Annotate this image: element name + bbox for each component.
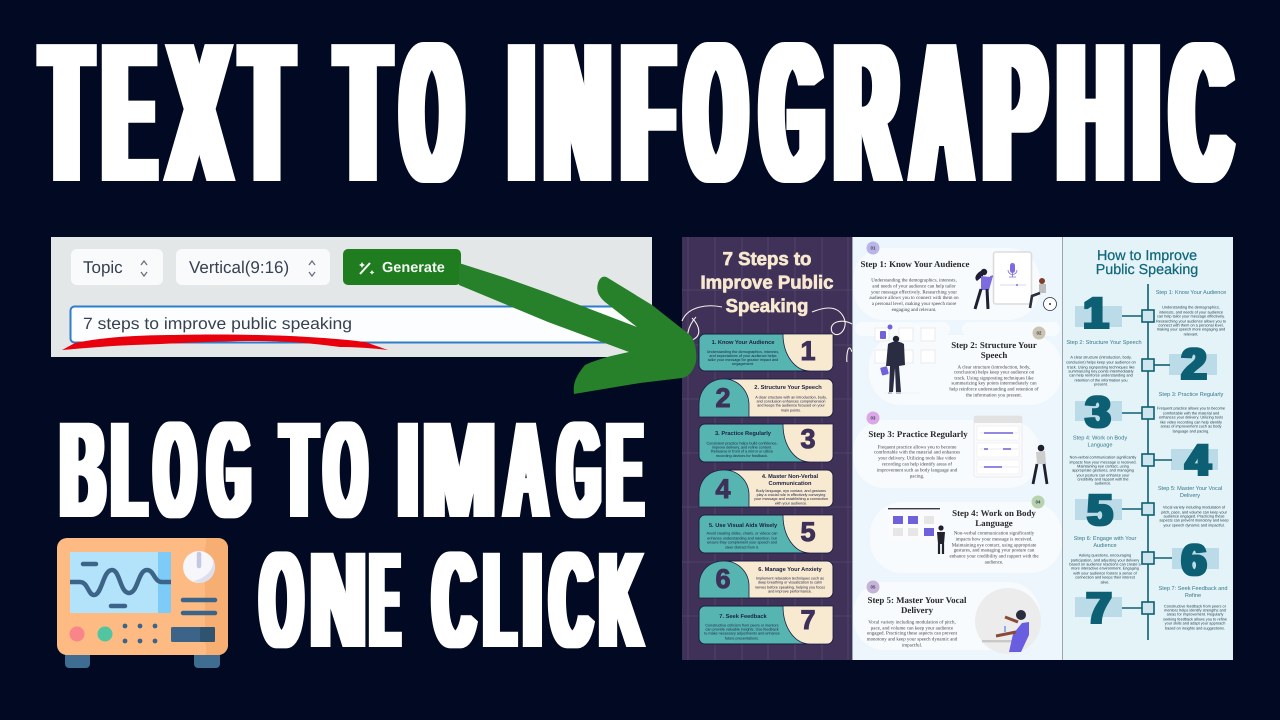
timeline step 7: 7: [1087, 584, 1111, 633]
step 5 block: pace, and volume can keep your audience: [871, 626, 954, 632]
heading: how to improve: Public Speaking: [1096, 262, 1198, 278]
timeline step 5: Vocal variety including modulation of: [1163, 506, 1226, 510]
step 2 block: 02: [1037, 330, 1042, 336]
input: prompt text: 7 steps to improve public speaking: [83, 315, 352, 333]
card: step 5: Avoid creating slides, charts, or videos can: [706, 532, 778, 536]
card: step 3: Consistent practice helps build confidence,: [706, 442, 778, 446]
card: step 2: [699, 379, 833, 417]
step 1 block: Understanding the demographics, interests,: [871, 278, 957, 284]
panel: teal timeline infographic: [1063, 237, 1233, 660]
timeline step 4: 4: [1186, 436, 1211, 485]
dropdown: topic: Topic: [83, 258, 123, 277]
step 4 block: enhance your credibility and rapport with the: [949, 554, 1039, 560]
step 5 block: [866, 580, 967, 648]
step 3 block: 03: [871, 416, 876, 420]
card: step 6: nerves before speaking, helping you focus: [755, 586, 825, 590]
card: step 3: Rehearse in front of a mirror or utilize: [711, 450, 773, 454]
headline: one click: [261, 524, 642, 677]
timeline step 4: audience.: [1095, 482, 1111, 486]
heading: 7 steps: Improve Public: [700, 272, 834, 292]
timeline step 5: pitch, pace, and volume can keep your: [1161, 510, 1228, 514]
card: step 4: Communication: [769, 480, 812, 487]
timeline step 6: alive.: [1101, 580, 1109, 584]
timeline step 4: Language: [1088, 442, 1112, 448]
card: step 1: [699, 334, 833, 371]
timeline step 1: Researching your audience allows you to: [1156, 320, 1226, 324]
timeline step 2: Step 2: Structure Your Speech: [1066, 339, 1142, 346]
illustration: dashboard and walking woman: [974, 416, 1047, 484]
card: step 5: 5: [800, 517, 816, 547]
timeline step 1: Understanding the demographics,: [1162, 306, 1220, 310]
step 5 block: Vocal variety including modulation of pitch,: [868, 620, 956, 626]
step 5 block: 05: [871, 584, 876, 590]
title: text to infographic: I: [510, 2, 532, 224]
step 1 block: engaging and relevant.: [892, 307, 936, 313]
decoration: white swirls: [682, 306, 852, 362]
title: text to infographic: I: [1136, 2, 1157, 224]
step 2 block: A clear structure (introduction, body,: [958, 364, 1030, 370]
illustration: profile board and presenter: [888, 508, 945, 554]
step 2 block: Speech: [981, 350, 1007, 360]
step 4 block: impacts how your message is received.: [955, 536, 1033, 542]
timeline step 6: 6: [1182, 536, 1206, 585]
headline: blog to image: M: [423, 394, 495, 547]
title: text to infographic: O: [687, 2, 745, 224]
icon: oscilloscope device: [57, 538, 228, 668]
card: step 4: with your audience.: [775, 502, 807, 506]
step 5 block: engaged. Practicing these aspects can prevent: [867, 630, 958, 636]
step 3 block: pacing.: [910, 474, 924, 480]
card: step 3: [699, 424, 833, 462]
headline: one click: O: [261, 524, 302, 677]
card: step 7: Constructive criticism from peers or mentors: [705, 624, 779, 628]
step 2 block: track. Using signposting techniques like: [954, 376, 1034, 382]
timeline step 7: areas for improvement. Regularly: [1167, 612, 1223, 616]
card: step 1: 1: [800, 336, 816, 366]
timeline step 4: appropriate gestures, and managing: [1072, 468, 1134, 472]
step 4 block: audience.: [985, 560, 1003, 566]
timeline step 5: Step 5: Master Your Vocal: [1158, 485, 1222, 492]
step 5 block: Step 5: Master Your Vocal: [868, 595, 967, 605]
title: text to infographic: N: [546, 2, 609, 224]
headline: blog to image: B: [61, 394, 105, 547]
step 1 block: a personal level, making your speech more: [872, 301, 957, 307]
timeline step 3: 3: [1086, 388, 1110, 437]
step 2 block: the information you present.: [966, 392, 1022, 398]
headline: blog to image: L: [112, 394, 146, 547]
timeline step 2: A clear structure (introduction, body,: [1070, 356, 1132, 360]
card: step 6: deep breathing or visualization to calm: [758, 580, 822, 584]
card: step 1: engagement.: [732, 362, 754, 366]
timeline step 4: Step 4: Work on Body: [1073, 434, 1127, 442]
title: text to infographic: T: [44, 2, 90, 224]
headline: blog to image: G: [209, 394, 250, 547]
card: step 4: [699, 470, 833, 507]
card: step 5: [699, 515, 833, 553]
timeline step 7: based on insights and suggestions.: [1165, 626, 1225, 630]
timeline step 4: Maintaining eye contact, using: [1077, 464, 1129, 468]
timeline step 3: enhances your delivery. Utilizing tools: [1159, 416, 1223, 420]
card: step 2: A clear structure with an introduction, body,: [755, 396, 827, 400]
headline: blog to image: I: [398, 394, 418, 547]
card: step 1: and expectations of your audience helps: [709, 354, 777, 358]
heading: 7 steps: 7 Steps to: [723, 248, 811, 269]
timeline step 5: [1075, 485, 1229, 535]
card: step 3: 3: [800, 424, 816, 454]
card: step 7: [699, 605, 833, 644]
card: step 1: Understanding the demographics, interests,: [707, 350, 779, 354]
underline: red brush stroke: [62, 335, 388, 350]
timeline step 6: more interactive environment. Engaging: [1071, 566, 1139, 570]
card: step 6: Implement relaxation techniques such as: [756, 576, 824, 580]
step 2 block: Step 2: Structure Your: [951, 340, 1037, 350]
headline: one click: C: [550, 524, 592, 677]
timeline step 3: areas of improvement such as body: [1161, 424, 1222, 428]
card: step 5: steer distract from it.: [725, 546, 759, 550]
timeline step 2: [1066, 339, 1217, 389]
timeline step 3: Step 3: Practice Regularly: [1159, 391, 1224, 398]
step 4 block: Language: [975, 518, 1013, 528]
title: text to infographic: R: [836, 2, 897, 224]
timeline step 6: Step 6: Engage with Your: [1074, 535, 1137, 542]
timeline step 4: impacts how your message is received.: [1069, 460, 1137, 464]
card: step 2: and keeps the audience focused on your: [757, 404, 826, 408]
step 1 block: Step 1: Know Your Audience: [861, 259, 970, 269]
card: step 4: your message and establishing a connection: [754, 497, 828, 501]
card: step 3: improve delivery, and refine content.: [712, 446, 772, 450]
timeline step 4: credibility and rapport with the: [1077, 478, 1129, 482]
card: step 6: and improve performance.: [768, 590, 812, 594]
title: text to infographic: [44, 2, 1230, 224]
button: generate: [343, 249, 461, 285]
timeline step 1: 1: [1084, 289, 1108, 338]
step 1 block: your message effectively. Researching your: [871, 290, 957, 296]
step 3 block: recording can help identify areas of: [882, 462, 952, 468]
timeline step 4: Non-verbal communication significantly: [1070, 456, 1136, 460]
timeline step 1: relevant.: [1184, 332, 1198, 336]
title: text to infographic: E: [105, 2, 154, 224]
card: step 6: 6. Manage Your Anxiety: [758, 566, 823, 573]
card: step 2: 2: [715, 383, 731, 413]
timeline step 5: 5: [1088, 486, 1112, 535]
card: step 4: play a crucial role in effectively conveying: [757, 493, 825, 497]
timeline step 1: Step 1: Know Your Audience: [1156, 289, 1226, 296]
timeline step 1: [1075, 289, 1226, 338]
timeline step 7: Step 7: Seek Feedback and: [1158, 585, 1228, 592]
step 1 block: audience allows you to connect with them on: [869, 295, 959, 301]
timeline step 6: Asking questions, encouraging: [1079, 554, 1131, 558]
step 4 block: Step 4: Work on Body: [952, 508, 1036, 518]
card: step 4: Body language, eye contact, and gestures: [756, 489, 826, 493]
card: step 7: 7. Seek Feedback: [719, 613, 768, 620]
card: step 1: 1. Know Your Audience: [712, 339, 774, 346]
title: text to infographic: T: [244, 2, 290, 224]
timeline step 7: your skills and adapt your approach: [1165, 622, 1225, 626]
headline: blog to image: O: [155, 394, 195, 547]
illustration: speaker at microphone: [975, 588, 1041, 654]
headline: blog to image: G: [559, 394, 600, 547]
headline: one click: L: [485, 524, 515, 677]
step 1 block: 01: [871, 246, 876, 250]
title: text to infographic: G: [763, 2, 822, 224]
timeline step 6: connection and keeps their interest: [1075, 576, 1136, 580]
timeline step 5: Delivery: [1180, 492, 1200, 499]
step 3 block: your delivery. Utilizing tools like video: [878, 456, 956, 462]
step 3 block: Frequent practice allows you to become: [878, 444, 957, 450]
dropdown: topic: [71, 249, 163, 285]
title: text to infographic: O: [403, 2, 461, 224]
title: text to infographic: H: [1059, 2, 1122, 224]
card: step 6: 6: [715, 564, 731, 594]
timeline step 3: like video recording can help identify: [1160, 420, 1222, 424]
timeline step 2: retention of the information you: [1074, 378, 1128, 382]
card: step 3: recording devices for feedback.: [716, 454, 768, 458]
timeline step 3: Frequent practice allows you to become: [1157, 406, 1225, 410]
timeline step 7: Refine: [1185, 592, 1201, 599]
step 1 block: and needs of your audience can help tailor: [872, 284, 956, 290]
card: step 7: can provide valuable insights. Use feedback: [705, 628, 779, 632]
step 2 block: [949, 326, 1046, 398]
headline: blog to image: A: [505, 394, 547, 547]
card: step 2: 2. Structure Your Speech: [754, 384, 822, 391]
step 3 block: improvement such as body language and: [877, 468, 958, 474]
step 4 block: Maintaining eye contact, using appropriate: [952, 542, 1037, 548]
timeline step 2: present.: [1094, 382, 1108, 386]
step 4 block: Non-verbal communication significantly: [954, 530, 1035, 536]
title: text to infographic: F: [623, 2, 672, 224]
timeline step 1: can help tailor your message effectively.: [1157, 314, 1225, 318]
step 4 block: [949, 496, 1044, 566]
headline: blog to image: [61, 394, 642, 547]
step 2 block: summarizing key points intermediately can: [951, 380, 1037, 386]
timeline step 6: based on audience reactions can create a: [1069, 562, 1142, 566]
headline: one click: C: [433, 524, 475, 677]
timeline step 1: connect with them on a personal level,: [1158, 324, 1224, 328]
text: K: [600, 524, 642, 677]
timeline step 5: aspects can prevent monotony and keep: [1159, 518, 1229, 522]
step 3 block: comfortable with the material and enhances: [874, 450, 960, 456]
title: text to infographic: T: [338, 2, 388, 224]
card: step 2: main points.: [781, 408, 801, 412]
step 3 block: [866, 412, 968, 480]
panel: purple infographic: [682, 237, 852, 660]
timeline step 6: participation, and adjusting your delivery: [1071, 558, 1139, 562]
illustration: tablet with mic and people: [975, 252, 1056, 310]
timeline step 6: Audience: [1093, 542, 1117, 549]
card: step 4: 4. Master Non-Verbal: [762, 473, 819, 480]
timeline step 5: your speech dynamic and impactful.: [1163, 524, 1225, 528]
headline: one click: E: [371, 524, 398, 677]
timeline step 6: with your audience fosters a sense of: [1073, 572, 1138, 576]
timeline step 7: [1075, 584, 1228, 633]
card: step 2: and conclusion enhances comprehension: [756, 400, 826, 404]
step 5 block: impactful.: [902, 642, 922, 648]
heading: 7 steps: Speaking: [726, 295, 808, 316]
panel: generator UI screenshot: [51, 237, 652, 357]
title: text to infographic: X: [170, 2, 228, 224]
step 3 block: Step 3: Practice Regularly: [868, 429, 968, 439]
timeline step 1: making your speech more engaging and: [1157, 328, 1225, 332]
step 1 block: [861, 242, 970, 313]
headline: blog to image: O: [325, 394, 366, 547]
button: generate: Generate: [382, 260, 445, 276]
timeline step 3: [1075, 388, 1225, 437]
timeline step 7: mentors helps identify strengths and: [1164, 608, 1226, 612]
arrow: green brush arrow: [459, 263, 696, 394]
step 4 block: 04: [1036, 500, 1041, 504]
illustration: man with squares: [875, 324, 935, 393]
timeline step 1: interests, and needs of your audience: [1159, 310, 1223, 314]
heading: 7 steps: [700, 248, 834, 316]
timeline step 4: [1069, 434, 1218, 486]
step 5 block: monotony and keep your speech dynamic and: [867, 636, 958, 642]
card: step 5: 5. Use Visual Aids Wisely: [709, 522, 778, 529]
timeline step 3: language and pacing.: [1173, 430, 1209, 434]
timeline step 2: can help reinforce understanding and: [1069, 374, 1133, 378]
panel: light serif infographic: [852, 237, 1063, 660]
headline: blog to image: T: [282, 394, 316, 547]
card: step 7: to make necessary adjustments and enhance: [704, 632, 780, 636]
headline: one click: I: [524, 524, 541, 677]
dropdown: vertical format: [176, 249, 330, 285]
timeline step 6: [1069, 535, 1219, 585]
card: step 7: 7: [800, 605, 816, 635]
timeline step 2: track. Using signposting techniques like: [1067, 366, 1135, 370]
step 2 block: conclusion) helps keep your audience on: [954, 370, 1035, 376]
card: step 6: [699, 561, 833, 598]
dropdown: vertical format: Vertical(9:16): [189, 258, 289, 277]
timeline step 2: 2: [1182, 340, 1206, 389]
step 4 block: gestures, and managing your posture can: [954, 548, 1035, 554]
title: text to infographic: A: [913, 2, 970, 224]
timeline step 5: audience engaged. Practicing these: [1163, 514, 1225, 518]
card: step 7: future presentations.: [725, 636, 759, 640]
step 5 block: Delivery: [901, 605, 934, 615]
title: text to infographic: P: [985, 2, 1044, 224]
card: step 1: tailor your message for greater impact and: [708, 358, 778, 362]
card: step 5: ensure they complement your speech and: [707, 540, 777, 544]
timeline step 4: your posture can enhance your: [1076, 474, 1130, 478]
input: prompt text: [70, 306, 646, 342]
timeline spine: [1147, 284, 1149, 640]
card: step 5: enhance understanding and retention, but: [707, 536, 778, 540]
card: step 4: 4: [715, 474, 731, 504]
text: E: [607, 394, 642, 547]
timeline step 7: seeking feedback allows you to refine: [1163, 618, 1227, 622]
headline: one click: N: [311, 524, 366, 677]
step 2 block: help reinforce understanding and retention of: [949, 386, 1039, 392]
heading: how to improve: How to Improve: [1097, 248, 1197, 264]
timeline step 7: Constructive feedback from peers or: [1164, 604, 1227, 608]
card: step 3: 3. Practice Regularly: [715, 430, 772, 437]
timeline step 2: summarizing key points intermediately: [1068, 370, 1134, 374]
timeline step 3: comfortable with the material and: [1163, 412, 1219, 416]
timeline step 2: conclusion) helps keep your audience on: [1066, 360, 1136, 364]
